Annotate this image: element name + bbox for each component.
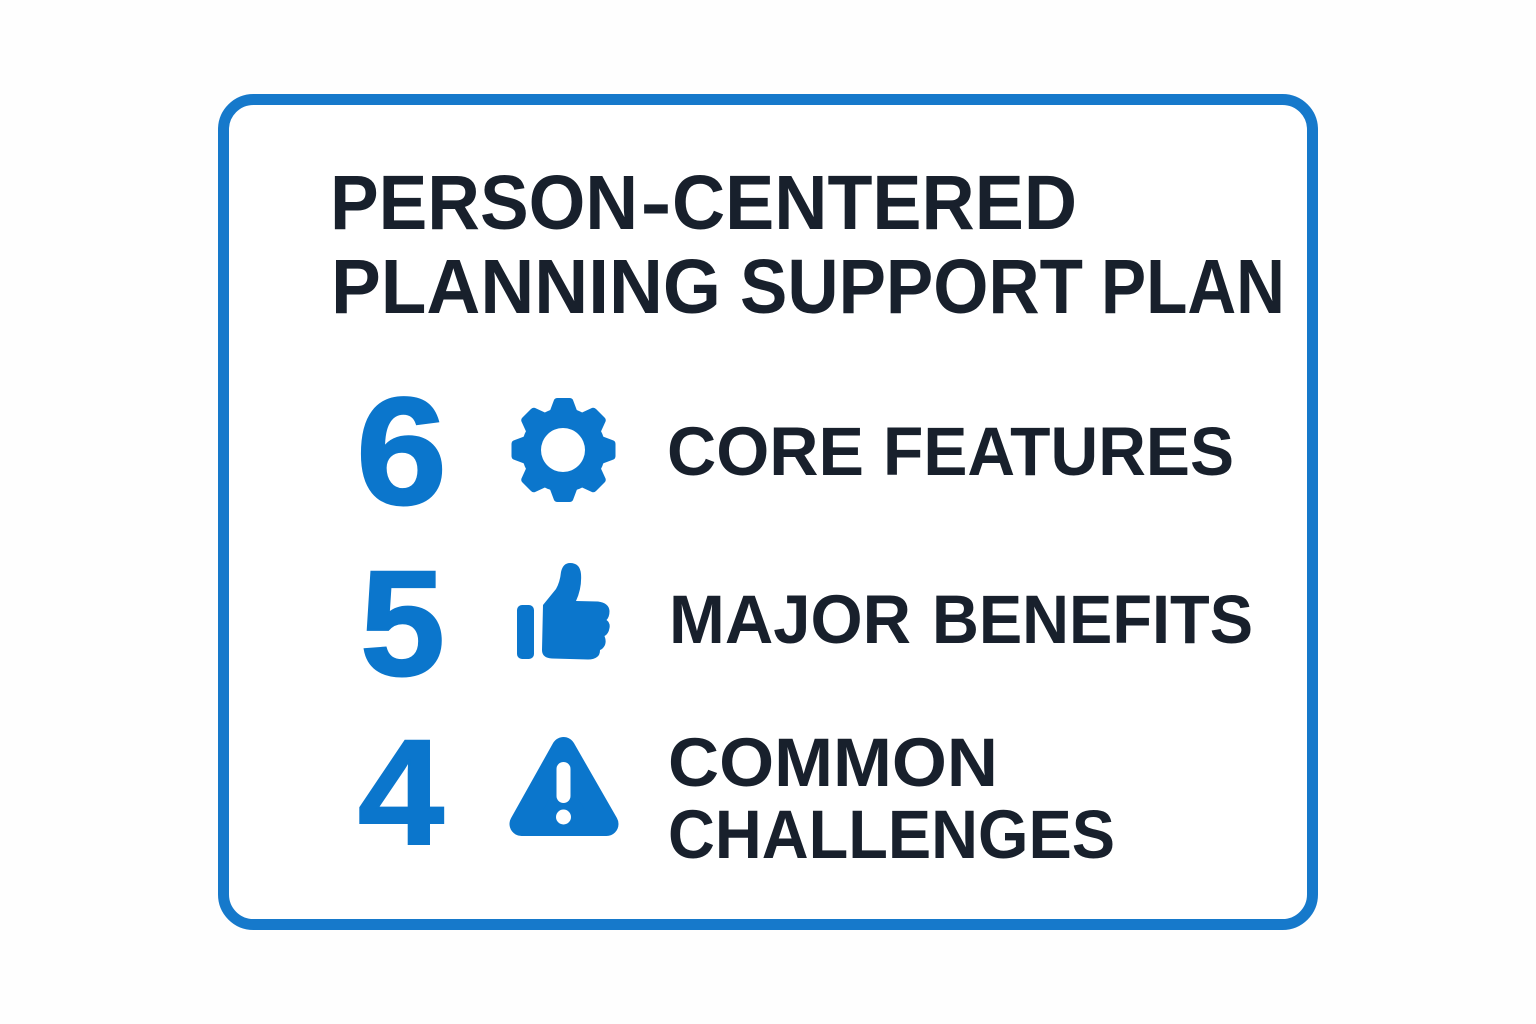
label: common challenges: COMMON	[668, 724, 998, 801]
number 4: 4	[358, 708, 444, 876]
label: major benefits: BENEFITS	[932, 581, 1253, 658]
title: CENTERED	[672, 160, 1077, 246]
panel: main card with blue border	[224, 100, 1312, 924]
icon: warning triangle	[522, 749, 606, 824]
row: major benefits	[360, 539, 1253, 707]
label: core features: CORE	[667, 413, 864, 490]
label: common challenges: CHALLENGES	[668, 796, 1115, 873]
title: -	[640, 160, 672, 246]
title: SUPPORT	[740, 244, 1083, 330]
title	[330, 160, 1285, 330]
label: core features: FEATURES	[883, 413, 1234, 490]
row: common challenges	[358, 708, 1115, 876]
title: PERSON	[330, 160, 638, 246]
icon: thumbs up	[517, 563, 610, 660]
title: PLANNING	[331, 244, 721, 330]
label: core features	[667, 413, 1234, 490]
label: major benefits	[669, 581, 1253, 658]
number 6: 6	[356, 366, 447, 537]
label: major benefits: MAJOR	[669, 581, 911, 658]
icon: gear	[512, 398, 616, 502]
title: PLAN	[1101, 244, 1285, 330]
number 5: 5	[360, 539, 445, 707]
label: common challenges	[668, 724, 1115, 873]
row: core features	[356, 366, 1234, 537]
